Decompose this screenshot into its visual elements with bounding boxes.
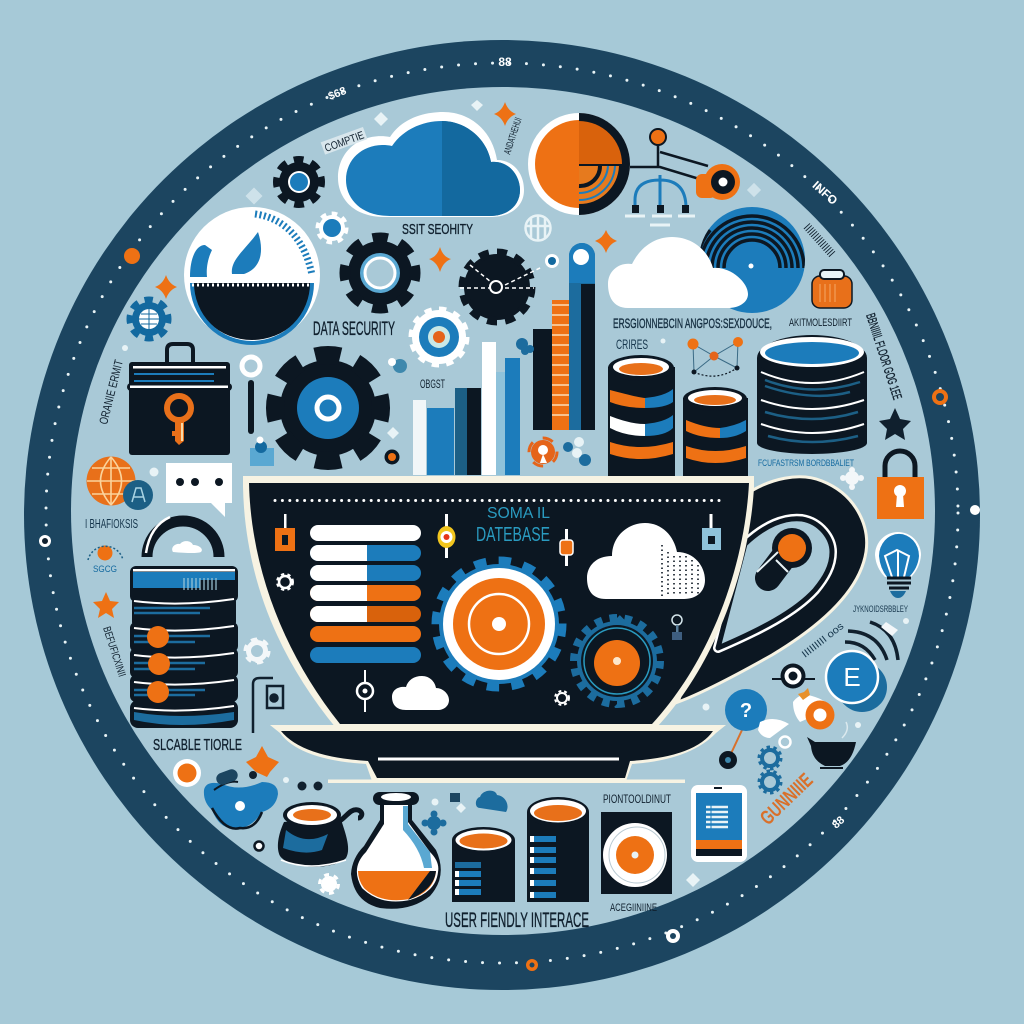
icon: white diamond: [387, 427, 399, 439]
icon: small gear left: [277, 574, 293, 590]
icon: light bulb: [875, 532, 921, 598]
label: obgst: OBGST: [420, 377, 445, 391]
icon: white dot: [150, 468, 158, 476]
text block: description: ERSGIONNEBCIN ANGPOS:SEXDOUCE,: [613, 315, 772, 331]
icon: large blue cloud: [338, 112, 524, 217]
heading: ssit security: SSIT SEOHITY: [402, 221, 473, 238]
icon: hook tag: [253, 678, 283, 733]
icon: blue gear with globe: [126, 296, 172, 342]
label: bharfoksis: I BHAFIOKSIS: [85, 516, 138, 531]
icon: database cylinder small: [452, 827, 515, 902]
icon: blue puzzle near bars: [563, 437, 591, 466]
decorative scatter: [122, 100, 909, 783]
icon: pie dial: [528, 113, 630, 215]
icon: database tower: [130, 566, 238, 728]
icon: dashed network gear: [460, 253, 559, 321]
icon: database stack 2: [683, 387, 748, 477]
icon: question bubble: [719, 689, 789, 769]
label: top center caption: ANDATHEHUI: [502, 116, 525, 156]
icon: orange sparkle far top: [494, 102, 516, 126]
heading: user friendly interface: USER FIENDLY INTERACE: [445, 909, 589, 932]
text block: description: [613, 315, 772, 352]
icon: orange donut: [793, 688, 834, 730]
icon: orange sparkle top: [595, 230, 617, 253]
icon: question bubble: ?: [740, 700, 752, 722]
icon: orange dot ring: [173, 759, 201, 787]
label: vertical left caption: ORANIE ERMIT: [96, 358, 126, 426]
label: vertical left caption: BEFUFICXINII: [100, 625, 128, 678]
icon: orange pin: [560, 529, 573, 566]
heading: cup title: SOMA IL: [487, 505, 550, 522]
icon: orange star left: [93, 592, 119, 618]
icon: magnifier pin: [242, 357, 260, 434]
icon: yellow pin: [438, 514, 456, 558]
icon: network nodes: [688, 337, 743, 376]
icon: orange sparkle: [429, 247, 451, 272]
icon: cloud in cup: [587, 523, 705, 599]
icon: orange padlock: [877, 451, 924, 519]
icon: medium black gear: [338, 231, 422, 315]
heading: scalable store: SLCABLE TIORLE: [153, 737, 242, 754]
icon: white gear left: [245, 639, 269, 663]
icon: database stack 3: [757, 335, 867, 454]
icon: database cylinder tall: [527, 797, 589, 902]
icon: orange dot badge: [384, 450, 400, 464]
icon: E badge with waves: [826, 622, 898, 712]
icon: teacup pot: [278, 802, 362, 867]
label: curved right caption: JYKNOIDSRBBLEY: [853, 604, 908, 614]
label: barcode caption: IIIIIIIIIIIIIII: [801, 221, 838, 260]
icon: white cloud: [608, 237, 748, 308]
icon: round leak emblem: [184, 207, 320, 343]
icon: small black gear: [273, 156, 325, 208]
icon: orange sparkle left: [155, 275, 177, 299]
icon: blue lock tag: [702, 514, 721, 550]
icon: white small gear: [318, 214, 346, 242]
heading: cup title: DATEBASE: [476, 524, 550, 546]
icon: blue puzzle piece: [388, 358, 407, 373]
icon: black eye node: [772, 664, 815, 688]
outer ring band: $68: [327, 85, 348, 103]
outer ring band: 88: [830, 814, 847, 831]
label: acegiinine: ACEGIINIINE: [610, 902, 657, 914]
label: pointool caption: PIONTOOLDINUT: [603, 794, 671, 806]
icon: orange jar: [812, 270, 852, 308]
label: curved right caption: [800, 604, 908, 660]
icon: blue gear chain: [759, 736, 790, 793]
text block: description: CRIRES: [616, 336, 648, 352]
icon: white target gear: [411, 309, 467, 365]
icon: blue orange gear: [574, 618, 660, 704]
heading: data security: DATA SECURITY: [313, 319, 395, 340]
icon: small cloud in cup: [392, 676, 449, 710]
icon: dark star: [879, 408, 911, 440]
icon: small blue puzzle: [422, 810, 446, 836]
bar list: [310, 525, 421, 663]
icon: orange badge below bars: [529, 438, 557, 466]
label: curved right caption: IIIIIIIII oos: [800, 621, 846, 660]
panel: coffee cup: [243, 476, 754, 728]
icon: white diamond right: [686, 873, 700, 887]
icon: magnifier in handle: [757, 528, 812, 578]
icon: concentric disc: [697, 207, 805, 313]
icon: E badge with waves: E: [843, 662, 861, 692]
label: orange rotated text: GUNNIIIE: [756, 769, 818, 830]
label: small blue caption: FCUFASTRSM BORDBBALIET: [758, 458, 854, 469]
label: aktimoles: AKITMOLESDIIRT: [789, 317, 852, 329]
icon: dotted sun badge: [88, 546, 123, 574]
icon: blue puzzle above bar: [516, 338, 534, 355]
icon: blue cradle: [204, 768, 278, 829]
icon: bowl: [807, 722, 856, 769]
icon: white globe: [526, 216, 550, 240]
outer ring band: INFO: [810, 178, 840, 208]
icon: orange star bottom: [246, 746, 279, 777]
icon: coffee cup handle: [678, 477, 867, 702]
icon: database stack 1: [608, 355, 675, 477]
icon: small gear bottom: [555, 691, 569, 705]
icon: node connector: [357, 670, 373, 712]
icon: flask: [320, 792, 441, 909]
bar chart: [413, 243, 595, 475]
label: top left caption: COMPTIE: [323, 130, 366, 155]
label: rotated right caption: BBNIIIIL FLOOR GOG 1EE: [863, 311, 905, 402]
icon: tablet: [691, 785, 747, 862]
icon: arc handle: [146, 517, 219, 557]
decorative dots: navy pair: [249, 771, 322, 790]
icon: dotted sun badge: SGCG: [93, 564, 117, 574]
icon: small pin: [672, 615, 682, 640]
icon: briefcase with key: [127, 344, 232, 455]
icon: blue puzzle chip: [250, 436, 274, 466]
icon: white snowflake gear: [840, 467, 864, 490]
icon: small ring: [254, 842, 264, 850]
icon: orange gear: [436, 561, 562, 687]
decorative dotted line on rim: [275, 499, 722, 502]
outer ring band: 88: [498, 55, 512, 69]
icon: orange tag: [275, 514, 295, 551]
icon: record card: [601, 812, 672, 894]
icon: orange globe: [86, 456, 153, 510]
icon: large black gear: [264, 344, 392, 472]
icon: speech bubble: [166, 463, 232, 517]
icon: node network with gear: [625, 129, 740, 225]
icon: small cloud dark square: [432, 791, 508, 813]
heading: cup title: [476, 505, 550, 546]
icon: saucer: [270, 725, 726, 783]
panel: cloud security: [338, 112, 524, 238]
